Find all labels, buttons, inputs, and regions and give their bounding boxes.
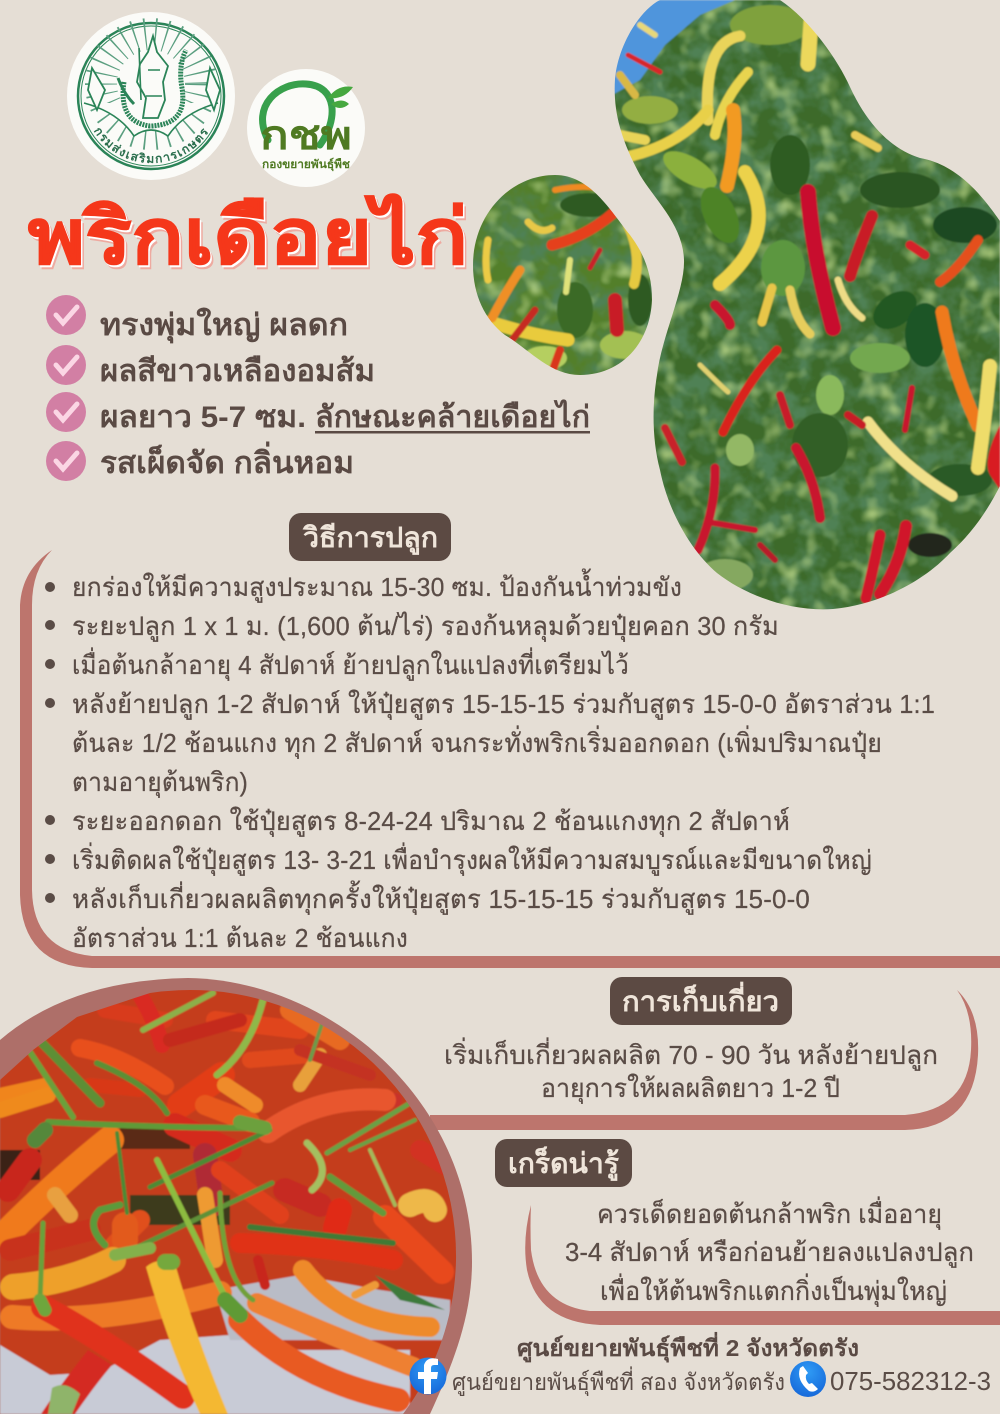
text block: tips: 3-4 สัปดาห์ หรือก่อนย้ายลงแปลงปลูก [565, 1237, 974, 1268]
text block: tips [565, 1196, 974, 1307]
text block: planting steps: ระยะออกดอก ใช้ปุ๋ยสูตร 8-24-24 ปริมาณ 2 ช้อนแกงทุก 2 สัปดาห์ [72, 806, 790, 837]
heading: harvest: การเก็บเกี่ยว [622, 981, 779, 1017]
text block: planting steps: หลังเก็บเกี่ยวผลผลิตทุกครั้งให้ปุ๋ยสูตร 15-15-15 ร่วมกับสูตร 15-0-0 [72, 880, 810, 915]
logo: department of agricultural extension: กรมส่งเสริมการเกษตร [94, 128, 208, 164]
logo: plant propagation division [247, 69, 365, 187]
heading: tips: เกร็ดน่ารู้ [508, 1146, 619, 1181]
trait text 1: ทรงพุ่มใหญ่ ผลดก [100, 307, 348, 344]
panel: tips frame [525, 1205, 1000, 1325]
trait text 3 [100, 399, 590, 434]
footer: facebook page name: ศูนย์ขยายพันธุ์พืชที่ สอง จังหวัดตรัง [452, 1366, 785, 1396]
text block: harvest: เริ่มเก็บเกี่ยวผลผลิต 70 - 90 วัน หลังย้ายปลูก [444, 1037, 938, 1071]
text block: tips: เพื่อให้ต้นพริกแตกกิ่งเป็นพุ่มใหญ่ [600, 1273, 947, 1307]
text block: harvest: อายุการให้ผลผลิตยาว 1-2 ปี [541, 1073, 840, 1104]
title: พริกเดือยไก่ [28, 193, 468, 280]
icon: check 3 [46, 392, 86, 432]
panel: harvest frame [430, 990, 978, 1130]
text block: planting steps: เริ่มติดผลใช้ปุ๋ยสูตร 13- 3-21 เพื่อบำรุงผลให้มีความสมบูรณ์และมีขนาดใหญ่ [72, 842, 872, 876]
heading: harvest [610, 977, 792, 1025]
logo: plant propagation division: กองขยายพันธุ์พืช [262, 157, 350, 172]
text block: planting steps: ระยะปลูก 1 x 1 ม. (1,600 ต้น/ไร่) รองก้นหลุมด้วยปุ๋ยคอก 30 กรัม [72, 611, 779, 642]
icon: phone [790, 1361, 826, 1397]
icon: check 4 [46, 441, 86, 481]
checklist: plant traits [46, 295, 590, 481]
text block: planting steps: ต้นละ 1/2 ช้อนแกง ทุก 2 สัปดาห์ จนกระทั่งพริกเริ่มออกดอก (เพิ่มปริมาณปุ๋ย [72, 725, 882, 759]
photo: small chili blob [473, 175, 652, 375]
title: พริกเดือยไก่ [31, 197, 471, 284]
panel: planting method frame [20, 550, 1000, 968]
text block: planting steps: อัตราส่วน 1:1 ต้นละ 2 ช้อนแกง [72, 923, 408, 953]
text block: planting steps: เมื่อต้นกล้าอายุ 4 สัปดาห์ ย้ายปลูกในแปลงที่เตรียมไว้ [72, 647, 629, 681]
heading: planting method: วิธีการปลูก [302, 522, 438, 555]
icon: check 2 [46, 345, 86, 385]
footer: phone number: 075-582312-3 [830, 1366, 991, 1396]
photo ring [0, 978, 472, 1414]
text block: planting steps [45, 568, 935, 953]
heading: tips [495, 1139, 632, 1187]
logo: department of agricultural extension [67, 12, 235, 180]
text block: planting steps: ตามอายุต้นพริก) [72, 767, 248, 798]
text block: harvest [444, 1037, 938, 1104]
photo: large chili plant blob [610, 0, 1000, 612]
text block: planting steps: หลังย้ายปลูก 1-2 สัปดาห์ ให้ปุ๋ยสูตร 15-15-15 ร่วมกับสูตร 15-0-0 อัตราส่วน 1:1 [72, 689, 935, 720]
icon: check 1 [46, 295, 86, 335]
trait text 4: รสเผ็ดจัด กลิ่นหอม [100, 441, 354, 480]
logo: plant propagation division: กชพ [260, 114, 352, 158]
photo: harvested chilies [0, 985, 460, 1414]
trait text 3: ลักษณะคล้ายเดือยไก่ [315, 399, 590, 434]
footer: centre name: ศูนย์ขยายพันธุ์พืชที่ 2 จังหวัดตรัง [517, 1331, 859, 1363]
trait text 2: ผลสีขาวเหลืองอมส้ม [100, 355, 375, 388]
icon: facebook [410, 1358, 446, 1394]
title: พริกเดือยไก่ [30, 195, 470, 282]
text block: planting steps: ยกร่องให้มีความสูงประมาณ 15-30 ซม. ป้องกันน้ำท่วมขัง [72, 568, 682, 603]
heading: planting method [289, 513, 451, 561]
text block: tips: ควรเด็ดยอดต้นกล้าพริก เมื่ออายุ [597, 1196, 942, 1230]
trait text 3: ผลยาว 5-7 ซม. [100, 401, 306, 434]
